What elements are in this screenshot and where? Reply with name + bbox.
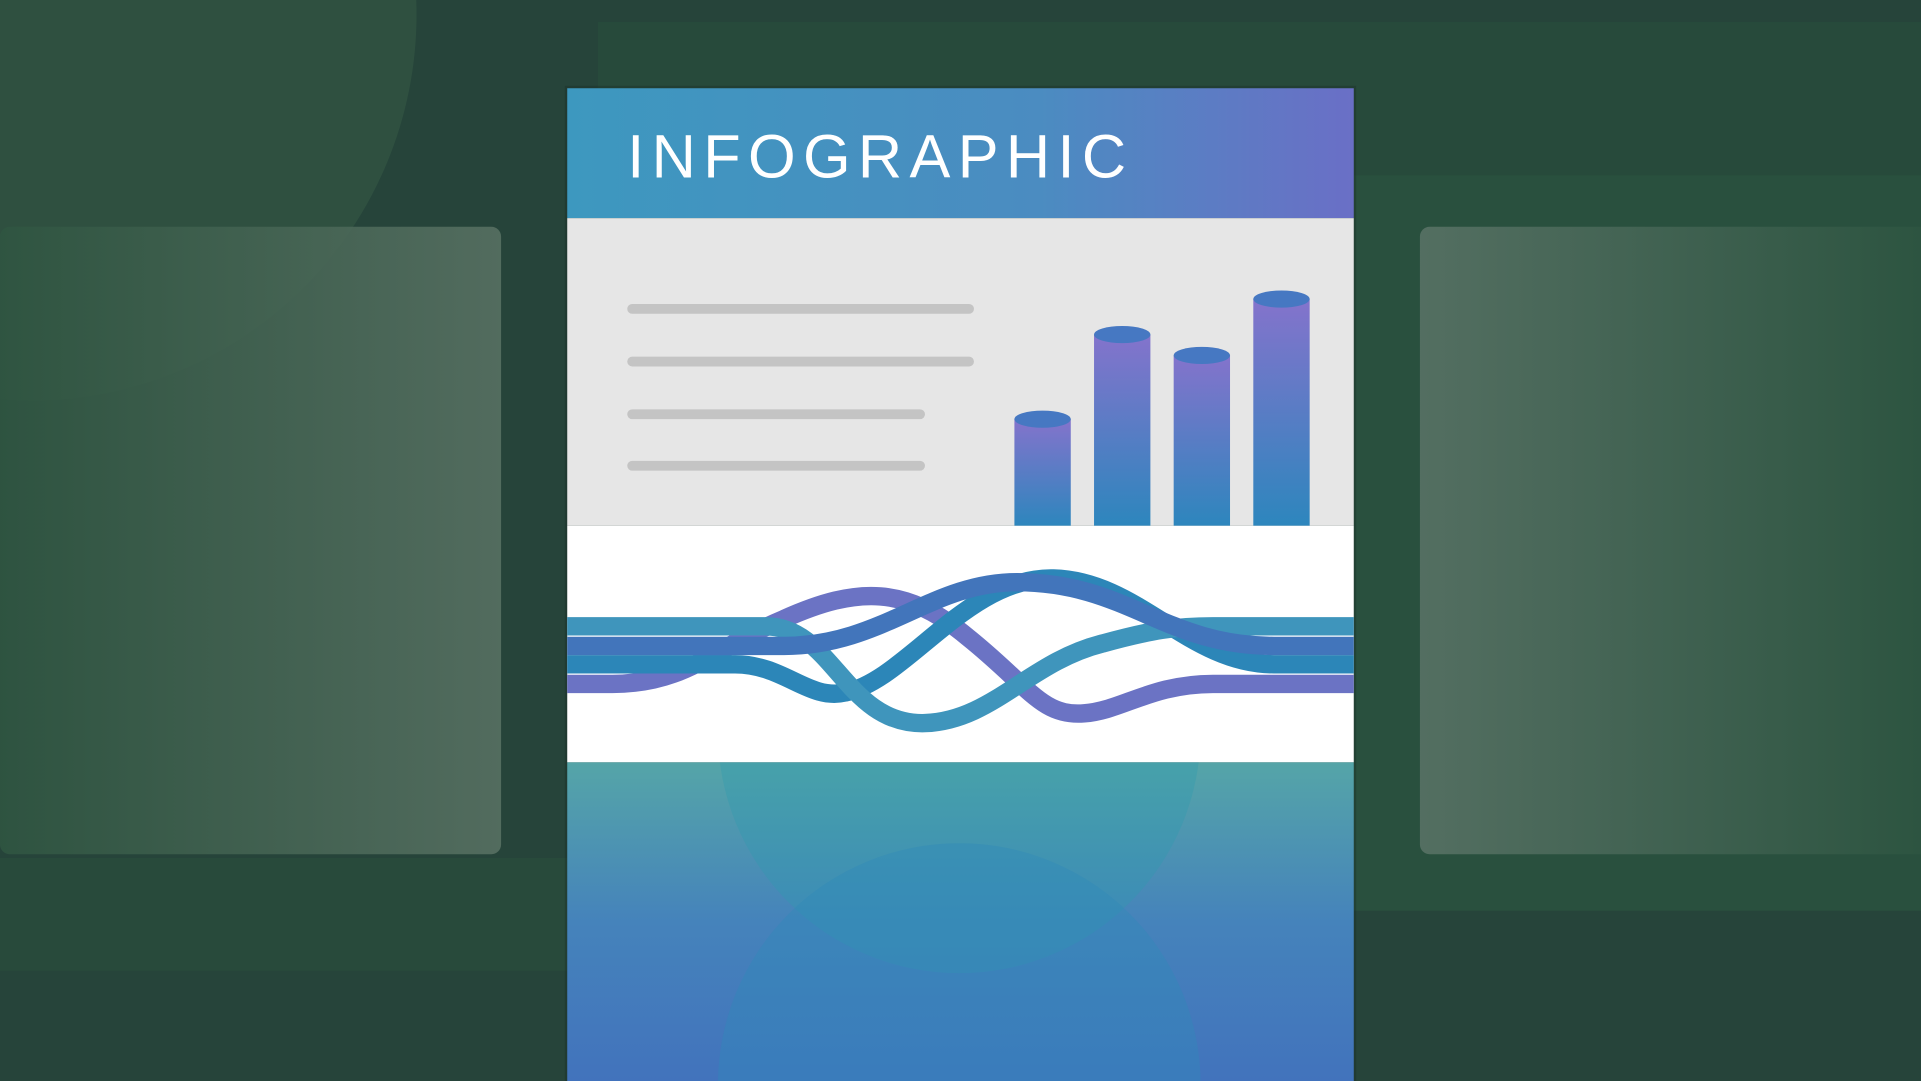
text lines [632,309,969,466]
bar chart [1014,290,1310,526]
bottom gradient section [567,762,1354,1081]
panel: right decorative card [1420,227,1921,854]
panel: infographic card [565,86,1356,1081]
title: INFOGRAPHIC [627,123,1133,191]
gray section [567,218,1354,526]
panel: left decorative card [0,227,501,854]
header [567,88,1354,218]
wave section [567,526,1354,762]
